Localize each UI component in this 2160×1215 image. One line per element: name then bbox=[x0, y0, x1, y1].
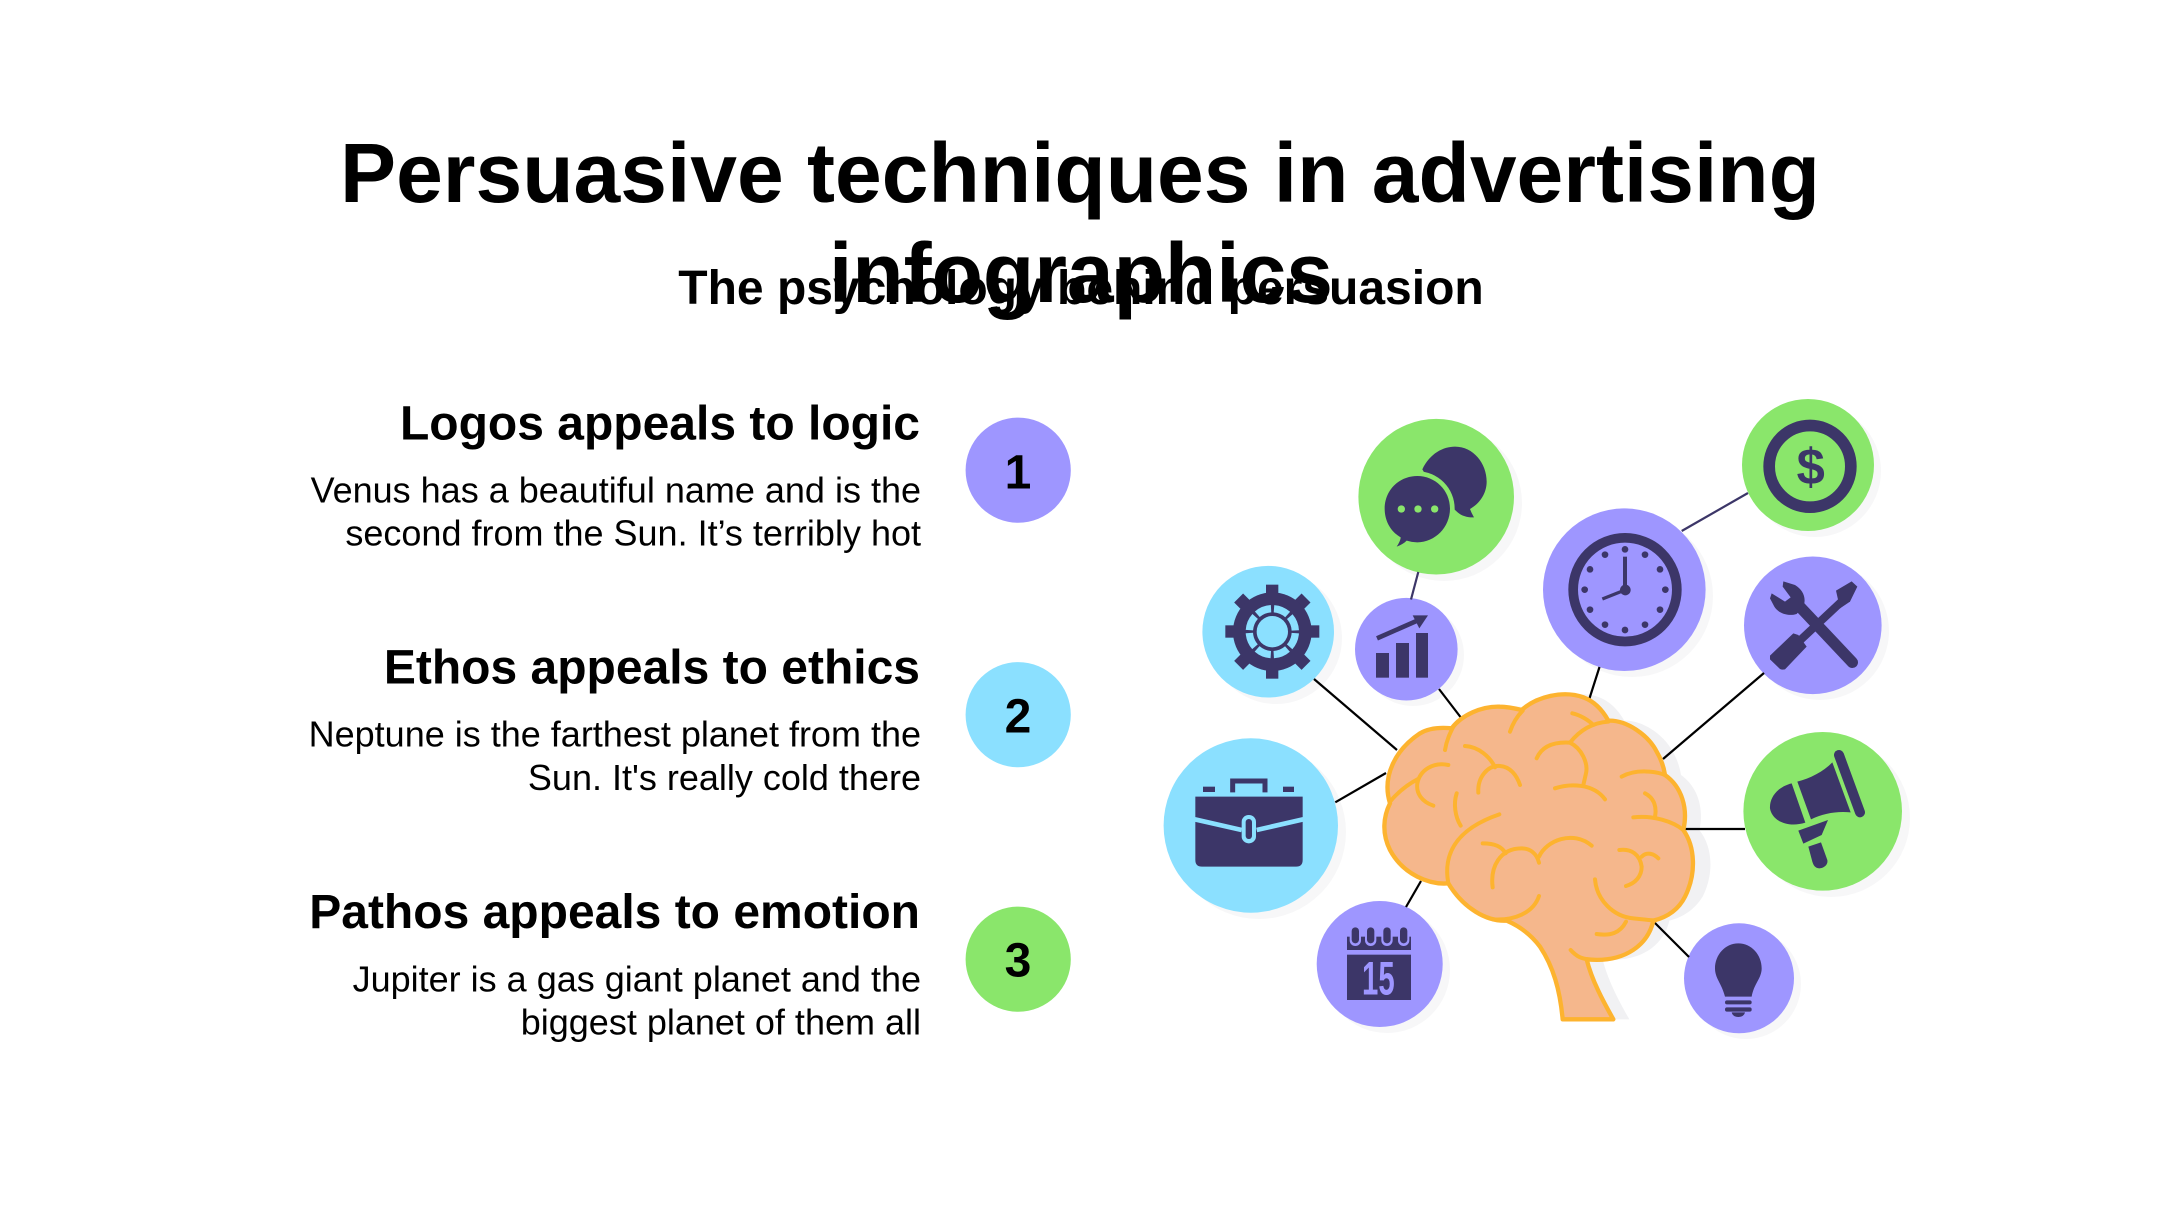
number badge 2 bbox=[966, 662, 1071, 767]
icon: megaphone bbox=[1743, 732, 1910, 897]
text block: pathos bbox=[309, 886, 921, 1042]
text block: ethos: Neptune is the farthest planet from the bbox=[309, 714, 921, 754]
title: infographics bbox=[829, 226, 1333, 320]
number badge 2: 2 bbox=[1005, 690, 1031, 744]
number badge 1 bbox=[966, 418, 1071, 523]
number badge 1: 1 bbox=[1005, 446, 1031, 499]
text block: pathos: Jupiter is a gas giant planet and the bbox=[353, 958, 921, 1000]
text block: pathos: biggest planet of them all bbox=[521, 1002, 921, 1042]
text block: logos: Venus has a beautiful name and is the bbox=[311, 470, 921, 510]
icon: dollar coin: $ bbox=[1797, 438, 1825, 495]
text block: ethos: Sun. It's really cold there bbox=[528, 757, 921, 798]
icon: speech bubbles bbox=[1358, 419, 1522, 581]
icon: clock bbox=[1543, 508, 1713, 677]
brain shadow bbox=[1400, 694, 1710, 1019]
icon: light bulb bbox=[1684, 923, 1801, 1039]
icon: bar chart bbox=[1355, 598, 1464, 706]
title: Persuasive techniques in advertising bbox=[340, 126, 1820, 220]
icon: briefcase bbox=[1164, 738, 1346, 919]
text block: pathos: Pathos appeals to emotion bbox=[309, 886, 920, 939]
icon: calendar bbox=[1317, 901, 1450, 1033]
text block: ethos bbox=[309, 642, 921, 798]
text block: logos: Logos appeals to logic bbox=[400, 398, 920, 450]
icon: brain bbox=[1384, 694, 1693, 1019]
connector lines bbox=[1314, 493, 1764, 957]
text block: logos bbox=[311, 398, 921, 554]
icon: gear bbox=[1202, 566, 1342, 704]
subtitle: The psychology behind persuasion bbox=[678, 262, 1484, 315]
text block: logos: second from the Sun. It’s terribly hot bbox=[345, 512, 921, 554]
icon: calendar: 15 bbox=[1362, 952, 1395, 1005]
title bbox=[340, 126, 1820, 320]
number badge 3: 3 bbox=[1005, 934, 1031, 988]
icon: dollar coin bbox=[1742, 399, 1881, 537]
number badge 3 bbox=[966, 907, 1071, 1012]
icon: wrench and screwdriver bbox=[1744, 556, 1889, 700]
text block: ethos: Ethos appeals to ethics bbox=[384, 642, 920, 694]
